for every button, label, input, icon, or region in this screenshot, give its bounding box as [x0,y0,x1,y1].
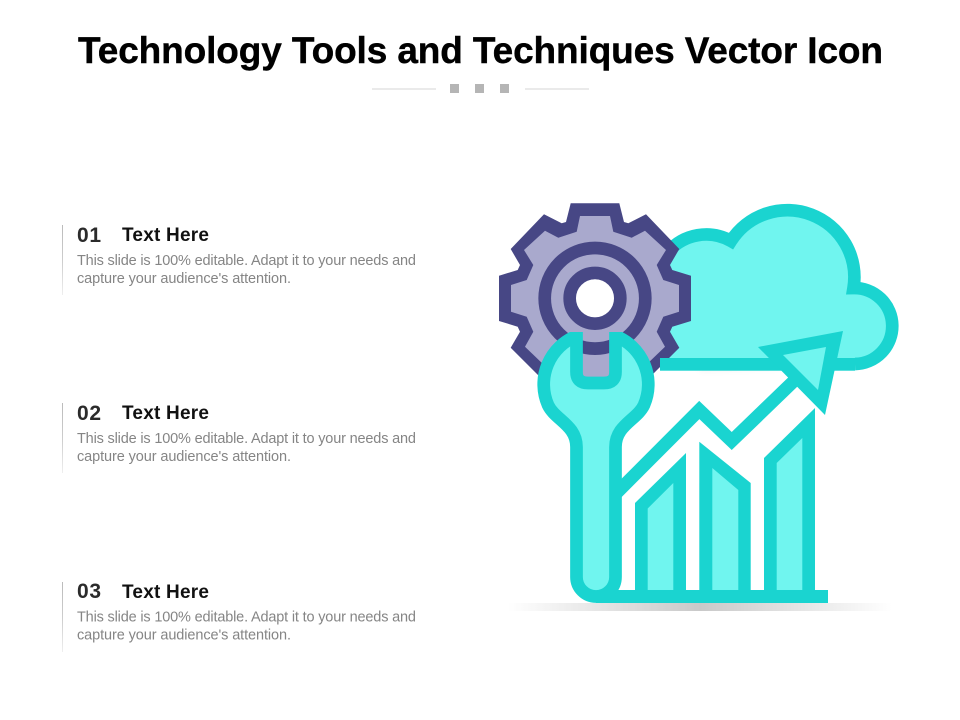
trend line [612,378,797,498]
icon: wrench [544,336,648,596]
ground shadow [508,603,892,611]
icon: technology tools [499,203,893,611]
icon: cloud [660,210,893,370]
item 01: capture your audience's attention. [77,271,291,287]
bar chart [635,408,815,590]
bar 2 [699,442,751,590]
cloud base line [660,358,855,371]
chart base line [596,590,828,603]
title divider [372,84,589,93]
item 02: capture your audience's attention. [77,449,291,465]
item 02: Text Here [122,403,209,424]
icon: arrow head [758,331,843,415]
item 03: 03 [77,580,101,603]
item 01: Text Here [122,225,209,246]
item 01: This slide is 100% editable. Adapt it to your needs and [77,253,416,269]
item 02: 02 [77,402,101,425]
bar 1 [635,453,686,590]
item 03 [62,580,416,652]
item 03: capture your audience's attention. [77,628,291,644]
item 01 [62,224,416,295]
icon: gear [499,203,691,393]
item 01: 01 [77,224,101,247]
item 03: Text Here [122,582,209,603]
title: Technology Tools and Techniques Vector Icon [78,30,883,71]
item 02 [62,402,416,473]
bar 3 [764,408,815,590]
item 02: This slide is 100% editable. Adapt it to your needs and [77,431,416,447]
item 03: This slide is 100% editable. Adapt it to your needs and [77,610,416,626]
